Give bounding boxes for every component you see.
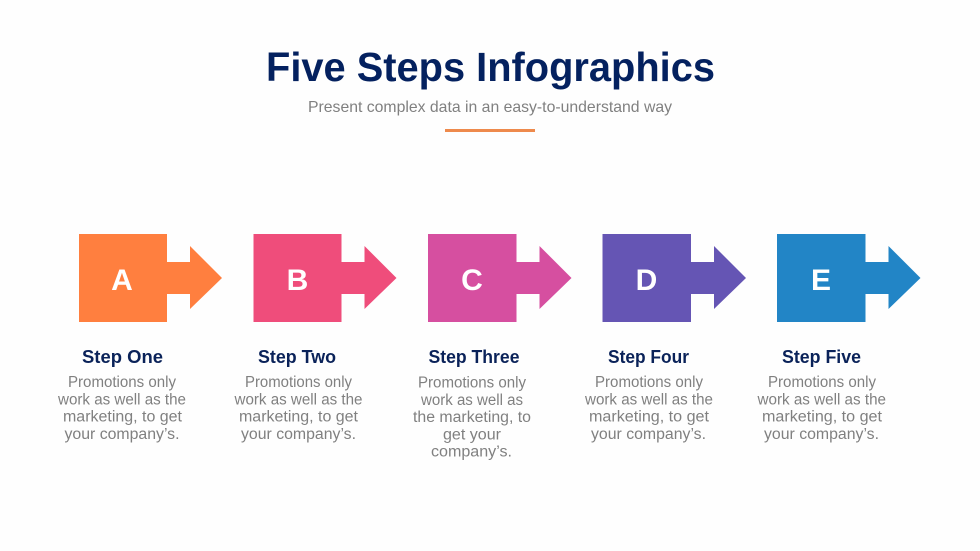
text block: step four: Promotions only xyxy=(595,374,703,391)
text block: step one: work as well as the xyxy=(57,392,186,408)
text block: step two: work as well as the xyxy=(234,392,362,408)
heading: step three: Step Three xyxy=(428,346,520,367)
text block: step four xyxy=(584,374,713,443)
text block: step four: your company’s. xyxy=(591,426,706,443)
icon: magenta arrow box C xyxy=(428,234,572,322)
icon: orange arrow box A xyxy=(79,234,222,322)
panel: step three xyxy=(413,234,572,460)
panel: step two xyxy=(234,234,396,443)
text block: step one: Promotions only xyxy=(68,374,176,391)
letter B: B xyxy=(287,264,308,297)
heading: step five: Step Five xyxy=(782,346,861,367)
text block: step one xyxy=(57,374,186,443)
heading: step two: Step Two xyxy=(258,346,336,367)
text block: step two: your company’s. xyxy=(241,426,356,443)
icon: blue arrow box E xyxy=(777,234,920,322)
text block: step three: get your xyxy=(443,426,501,444)
subtitle: Present complex data in an easy-to-understand way xyxy=(308,99,672,116)
letter D: D xyxy=(636,264,657,297)
letter E: E xyxy=(811,264,831,297)
letter C: C xyxy=(461,264,483,297)
panel: step five xyxy=(757,234,920,443)
text block: step five: your company’s. xyxy=(764,426,879,443)
text block: step three: work as well as xyxy=(420,392,523,409)
text block: step four: marketing, to get xyxy=(589,408,710,426)
text block: step three: the marketing, to xyxy=(413,409,531,426)
panel: step one xyxy=(57,234,222,443)
text block: step four: work as well as the xyxy=(584,392,713,408)
text block: step one: your company’s. xyxy=(64,426,180,443)
text block: step five: marketing, to get xyxy=(762,408,883,426)
panel: step four xyxy=(584,234,746,443)
icon: purple arrow box D xyxy=(602,234,746,322)
text block: step two: marketing, to get xyxy=(239,408,359,426)
title accent line xyxy=(445,129,535,132)
title: Five Steps Infographics xyxy=(266,44,715,90)
heading: step four: Step Four xyxy=(608,346,689,367)
text block: step two xyxy=(234,374,362,443)
letter A: A xyxy=(111,264,133,297)
text block: step three xyxy=(413,374,531,460)
text block: step two: Promotions only xyxy=(245,374,352,391)
text block: step five xyxy=(757,374,886,443)
text block: step three: Promotions only xyxy=(418,374,526,392)
text block: step five: Promotions only xyxy=(768,374,876,391)
text block: step three: company’s. xyxy=(431,444,512,460)
text block: step five: work as well as the xyxy=(757,392,886,408)
text block: step one: marketing, to get xyxy=(63,408,183,426)
heading: step one: Step One xyxy=(82,346,163,367)
icon: pink arrow box B xyxy=(254,234,396,322)
